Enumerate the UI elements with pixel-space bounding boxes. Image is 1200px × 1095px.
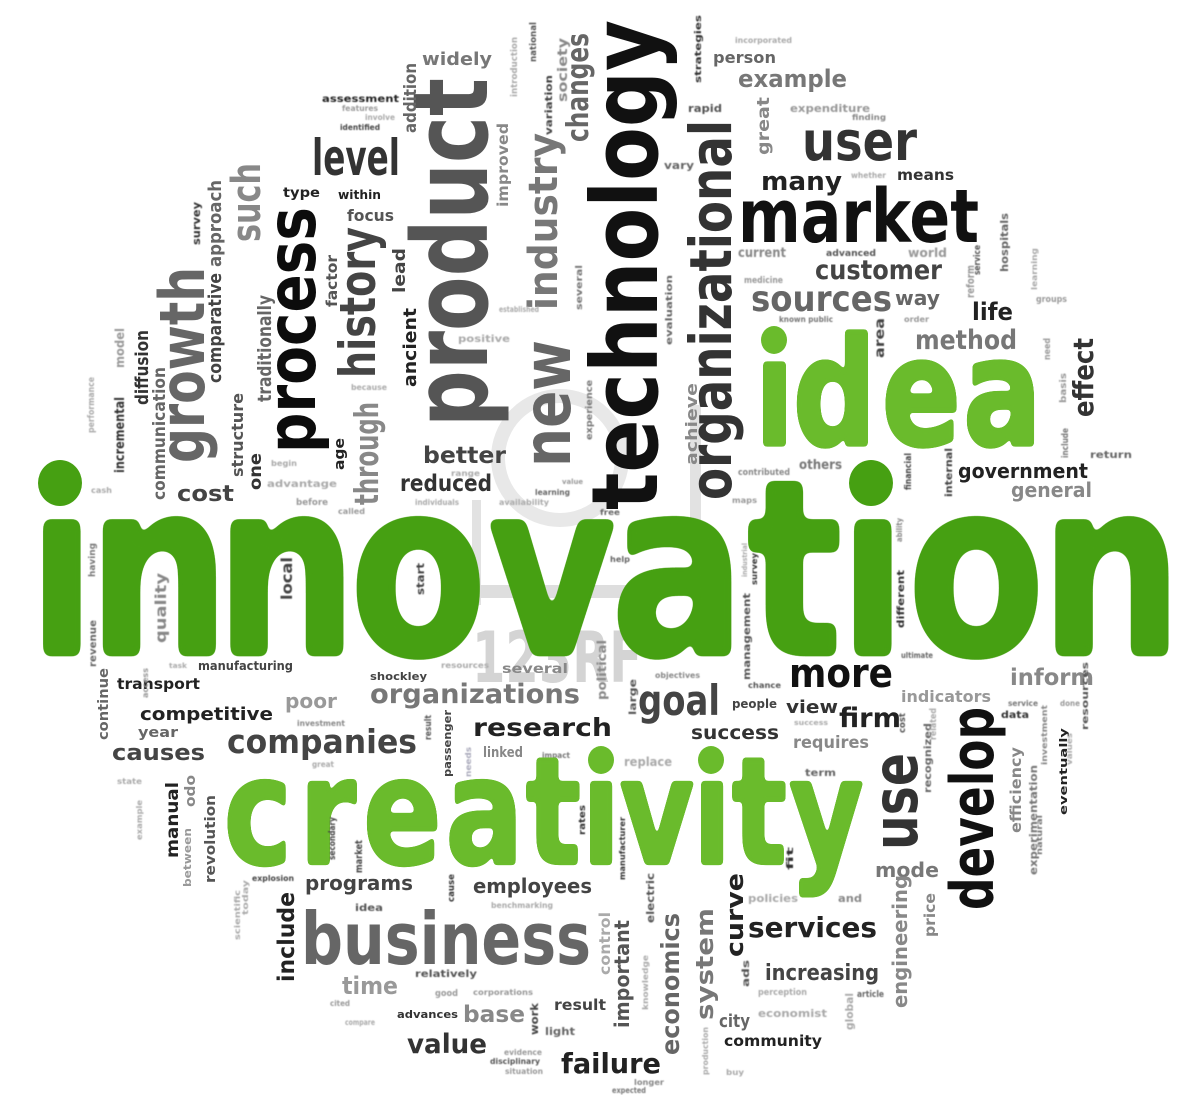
lower-right medium words: economics xyxy=(656,913,685,1055)
lower-left tiny words: corporations xyxy=(473,988,533,997)
top-left tiny words: individuals xyxy=(415,498,459,507)
top-right tiny words: others xyxy=(799,458,842,473)
top-right medium words: great xyxy=(754,97,774,155)
lower-right medium words: view xyxy=(786,697,838,718)
lower-left medium words: linked xyxy=(483,745,523,761)
top-right tiny words: advanced xyxy=(826,249,876,259)
lower-right tiny words: data xyxy=(1001,710,1029,721)
lower-left medium words: between xyxy=(181,828,194,887)
top-left medium words: new xyxy=(509,340,586,467)
top-left tiny words: advantage xyxy=(267,479,337,490)
top-left medium words xyxy=(132,33,596,507)
icon: round dot of idea xyxy=(761,326,787,354)
top-left medium words: structure xyxy=(228,393,247,477)
top-left tiny words: cash xyxy=(91,486,112,495)
central small words: local xyxy=(278,557,296,600)
top-left medium words: industry xyxy=(521,133,567,310)
tiny words over creativity: rates xyxy=(578,805,588,835)
lower-left medium words: revolution xyxy=(203,795,219,883)
top-left medium words: factor xyxy=(323,254,341,307)
lower-right tiny words: objectives xyxy=(655,671,700,680)
lower-right tiny words: perception xyxy=(758,988,807,998)
top-left medium words: better xyxy=(423,443,507,469)
top-right tiny words: maps xyxy=(732,496,757,505)
lower-right tiny words: chance xyxy=(748,681,782,690)
lower-left medium words: several xyxy=(502,662,568,677)
lower-right tiny words: service xyxy=(1008,699,1039,708)
lower-right tiny words: article xyxy=(857,990,884,1000)
word: organizational: organizational xyxy=(677,120,745,500)
lower-left tiny words: light xyxy=(545,1025,575,1038)
lower-left medium words: causes xyxy=(112,741,205,766)
top-right tiny words: order xyxy=(904,315,929,324)
word: business: business xyxy=(301,897,591,981)
top-left tiny words: availability xyxy=(499,498,550,507)
central small words: help xyxy=(610,555,630,564)
lower-right medium words: firm xyxy=(839,703,901,734)
lower-right medium words: services xyxy=(748,911,877,944)
icons: round dots of innovation xyxy=(38,460,893,506)
top-left tiny words: assessment xyxy=(322,94,399,105)
heading word: creativity: creativity xyxy=(223,725,865,900)
watermark xyxy=(472,396,701,699)
top-left tiny words: value xyxy=(562,478,583,486)
top-left medium words: within xyxy=(338,188,381,202)
lower-right medium words: goal xyxy=(638,676,720,725)
lower-right tiny words: longer xyxy=(634,1078,664,1087)
top-right tiny words: several xyxy=(575,265,585,310)
tiny words over creativity xyxy=(328,805,796,880)
lower-left tiny words: work xyxy=(528,1002,541,1035)
top-right medium words: many xyxy=(761,167,842,197)
lower-right tiny words: investment xyxy=(1040,705,1049,765)
lower-right medium words: increasing xyxy=(765,961,879,986)
lower-right medium words: inform xyxy=(1010,665,1094,691)
top-right medium words: user xyxy=(802,110,917,173)
central small words: revenue xyxy=(88,620,99,667)
lower-right tiny words: political xyxy=(595,640,609,700)
lower-right tiny words: and xyxy=(838,892,862,905)
lower-left medium words: research xyxy=(473,713,612,742)
lower-right tiny words: cost xyxy=(898,712,908,733)
top-right tiny words: include xyxy=(1061,428,1071,458)
lower-left tiny words: result xyxy=(424,714,434,740)
top-right medium words: general xyxy=(1011,478,1092,502)
top-right tiny words: vary xyxy=(664,159,694,172)
top-right tiny words: return xyxy=(1090,450,1132,461)
top-right medium words: example xyxy=(738,65,847,93)
lower-right tiny words: expected xyxy=(612,1086,646,1095)
lower-right medium words: failure xyxy=(561,1047,661,1080)
lower-right tiny words: experimentation xyxy=(1027,765,1040,875)
top-left tiny words: features xyxy=(342,104,378,113)
tiny words over creativity: fit xyxy=(786,846,796,870)
top-right tiny words: current xyxy=(738,246,786,261)
lower-right medium words xyxy=(554,651,1094,1080)
lower-left medium words: programs xyxy=(305,871,413,895)
top-left tiny words: strategies xyxy=(694,15,704,83)
lower-left tiny words: explosion xyxy=(252,874,294,883)
central small words: different xyxy=(896,570,907,628)
lower-left tiny words: evidence xyxy=(504,1048,543,1057)
lower-right tiny words: recognized xyxy=(923,723,934,793)
top-left medium words: process xyxy=(253,207,332,453)
lower-left tiny words: state xyxy=(117,777,143,786)
top-right tiny words: whether xyxy=(851,171,886,180)
top-left medium words: age xyxy=(332,438,348,470)
lower-left medium words: employees xyxy=(473,874,592,898)
lower-right tiny words: values xyxy=(1065,733,1074,765)
tiny words over creativity: market xyxy=(354,840,365,873)
top-right medium words xyxy=(682,48,1100,502)
top-left tiny words: involve xyxy=(365,113,396,122)
top-right medium words: customer xyxy=(815,255,943,286)
lower-right medium words: mode xyxy=(875,858,939,882)
top-right tiny words: hospitals xyxy=(998,213,1011,272)
top-left tiny words xyxy=(87,15,704,517)
lower-right medium words: use xyxy=(859,753,932,850)
top-left medium words: such xyxy=(224,163,270,242)
lower-left tiny words: impact xyxy=(542,751,570,760)
top-right tiny words: known public xyxy=(779,315,833,324)
top-left tiny words: called xyxy=(338,507,365,516)
central small words: management xyxy=(742,593,753,680)
top-left medium words: approach xyxy=(205,180,226,267)
top-right medium words: method xyxy=(915,325,1017,356)
top-right medium words: means xyxy=(897,166,954,184)
lower-left tiny words: cause xyxy=(447,874,457,902)
top-right tiny words: basis xyxy=(1059,373,1069,403)
top-left tiny words: performance xyxy=(87,377,97,433)
central small words: start xyxy=(414,563,427,595)
top-right tiny words: world xyxy=(908,246,947,260)
lower-left medium words: base xyxy=(463,1002,525,1028)
top-left medium words: traditionally xyxy=(254,295,276,402)
top-left medium words: changes xyxy=(561,33,596,142)
lower-right medium words: result xyxy=(554,996,606,1014)
top-left tiny words: model xyxy=(113,328,127,368)
lower-left medium words: advances xyxy=(397,1008,458,1021)
lower-right tiny words: success xyxy=(794,719,828,727)
lower-right medium words: success xyxy=(691,722,779,744)
lower-left tiny words: idea xyxy=(355,903,383,914)
lower-left tiny words: investment xyxy=(297,719,345,728)
top-left tiny words: range xyxy=(451,469,481,478)
lower-left medium words: competitive xyxy=(140,704,273,725)
top-left medium words: communication xyxy=(150,367,170,500)
lower-right tiny words: related xyxy=(929,708,939,740)
top-left medium words: level xyxy=(312,129,400,187)
lower-right tiny words: ads xyxy=(741,960,752,987)
top-left medium words: focus xyxy=(347,206,394,225)
top-right tiny words: financial xyxy=(904,453,914,490)
lower-left tiny words: situation xyxy=(505,1067,543,1076)
lower-right medium words: eventually xyxy=(1057,728,1070,815)
top-right medium words: achieve xyxy=(682,383,701,465)
lower-right tiny words: natural xyxy=(1035,815,1044,855)
top-left tiny words: society xyxy=(556,37,571,102)
watermark: 123RF xyxy=(472,617,642,699)
top-left medium words: ancient xyxy=(400,308,421,387)
top-left medium words: reduced xyxy=(400,471,492,497)
lower-left medium words: year xyxy=(138,725,178,741)
heading word: innovation: innovation xyxy=(27,428,1183,714)
top-left medium words: type xyxy=(283,186,320,201)
lower-right medium words: more xyxy=(789,651,893,697)
central small words xyxy=(88,517,907,680)
top-right tiny words: groups xyxy=(1036,295,1067,305)
top-right medium words: way xyxy=(895,286,940,310)
top-left tiny words: variation xyxy=(544,75,555,135)
top-left tiny words: because xyxy=(351,383,388,392)
lower-right tiny words: large xyxy=(628,679,639,715)
lower-left tiny words: example xyxy=(135,799,144,840)
lower-right medium words: engineering xyxy=(888,875,912,1008)
central small words: survey xyxy=(750,552,759,585)
lower-left medium words xyxy=(96,659,612,1060)
lower-right medium words: city xyxy=(719,1011,750,1032)
top-right tiny words: experience xyxy=(585,380,595,440)
top-right medium words: life xyxy=(972,298,1013,326)
lower-right tiny words: knowledge xyxy=(641,954,650,1010)
lower-left tiny words: task xyxy=(169,662,187,670)
lower-right tiny words: global xyxy=(843,993,856,1030)
top-right tiny words: rapid xyxy=(688,102,722,115)
lower-right medium words: people xyxy=(732,697,777,711)
top-right tiny words: need xyxy=(1043,338,1053,360)
top-left medium words: lead xyxy=(390,248,410,293)
top-right tiny words: expenditure xyxy=(790,102,870,115)
lower-right medium words: efficiency xyxy=(1007,747,1025,833)
top-left tiny words: incremental xyxy=(113,397,128,473)
lower-left medium words: transport xyxy=(117,675,200,693)
top-right tiny words: incorporated xyxy=(735,36,792,45)
lower-left medium words: passenger xyxy=(441,709,454,777)
top-right medium words: person xyxy=(713,48,776,67)
lower-left medium words: continue xyxy=(96,668,112,740)
lower-left medium words: shockley xyxy=(370,670,427,683)
lower-left tiny words: scientific xyxy=(233,890,242,940)
lower-left tiny words xyxy=(117,662,575,1076)
lower-left tiny words: disciplinary xyxy=(490,1057,541,1066)
top-right medium words: sources xyxy=(751,279,892,320)
top-right tiny words: area xyxy=(873,318,888,358)
lower-left tiny words: benchmarking xyxy=(491,901,553,910)
top-left medium words: through xyxy=(347,402,386,505)
lower-right medium words: price xyxy=(921,893,939,937)
top-left tiny words: free xyxy=(600,508,621,517)
lower-right medium words: control xyxy=(596,912,614,975)
lower-right medium words: important xyxy=(610,920,634,1028)
top-left medium words: growth xyxy=(146,267,219,463)
top-left tiny words: national xyxy=(529,22,539,62)
central small words: ability xyxy=(895,517,904,542)
top-left tiny words: begin xyxy=(271,459,297,468)
top-left medium words: history xyxy=(329,227,387,378)
lower-right tiny words: replace xyxy=(624,755,672,769)
top-left medium words: addition xyxy=(401,63,421,133)
lower-left medium words: companies xyxy=(227,722,417,761)
lower-right tiny words: done xyxy=(1060,699,1081,708)
lower-left tiny words: good xyxy=(435,989,458,999)
top-left medium words: cost xyxy=(177,482,235,507)
top-right tiny words: reform xyxy=(964,265,977,298)
lower-right medium words: requires xyxy=(793,733,869,753)
icons: round dots of creativity xyxy=(588,746,724,774)
top-right tiny words: evaluation xyxy=(665,275,675,345)
lower-left medium words: manual xyxy=(163,782,183,858)
top-right tiny words: finding xyxy=(852,113,886,122)
top-right medium words: market xyxy=(738,174,979,260)
lower-left tiny words: relatively xyxy=(415,969,478,980)
central small words: resources xyxy=(441,661,489,670)
top-right medium words: effect xyxy=(1067,338,1100,417)
top-left tiny words: before xyxy=(296,498,328,508)
lower-left medium words: include xyxy=(274,892,300,982)
lower-left medium words: manufacturing xyxy=(198,659,293,673)
lower-left tiny words: today xyxy=(241,879,250,915)
top-right tiny words: contributed xyxy=(738,468,790,478)
top-right tiny words: service xyxy=(973,245,983,275)
top-right medium words: government xyxy=(958,459,1088,483)
top-left medium words: one xyxy=(246,453,266,490)
top-left tiny words: established xyxy=(499,305,539,314)
lower-right tiny words: resources xyxy=(1081,662,1091,730)
lower-right tiny words: economist xyxy=(758,1007,827,1020)
lower-right tiny words: buy xyxy=(726,1068,745,1077)
top-left tiny words: introduction xyxy=(510,37,520,97)
lower-left tiny words: compare xyxy=(345,1018,375,1027)
lower-left medium words: poor xyxy=(285,689,337,713)
top-left medium words: diffusion xyxy=(132,330,153,405)
top-left tiny words: survey xyxy=(190,202,203,245)
lower-left medium words: time xyxy=(342,972,398,1000)
heading word: idea: idea xyxy=(754,306,1042,481)
lower-right medium words: indicators xyxy=(901,687,991,706)
central small words: quality xyxy=(152,573,170,643)
lower-right tiny words: ultimate xyxy=(901,651,933,660)
lower-right tiny words: electric xyxy=(644,873,657,923)
central small words: having xyxy=(88,543,98,577)
top-left tiny words: learning xyxy=(535,488,570,497)
top-right tiny words: learning xyxy=(1030,248,1039,290)
lower-left tiny words: cited xyxy=(330,999,350,1008)
lower-left medium words: organizations xyxy=(370,679,580,710)
lower-right tiny words: production xyxy=(701,1027,710,1075)
lower-left medium words: value xyxy=(407,1029,487,1060)
top-left tiny words: positive xyxy=(458,334,510,345)
lower-left tiny words: access xyxy=(141,668,150,698)
top-left medium words: widely xyxy=(422,49,492,70)
lower-right medium words: system xyxy=(691,908,719,1020)
lower-right tiny words: term xyxy=(805,768,836,779)
top-right tiny words: medicine xyxy=(744,276,783,286)
top-right tiny words: internal xyxy=(944,448,955,497)
lower-left tiny words: great xyxy=(312,760,334,769)
lower-right medium words: develop xyxy=(938,707,1008,910)
top-right tiny words xyxy=(575,36,1132,505)
lower-left medium words: odo xyxy=(183,775,199,807)
top-left medium words: improved xyxy=(494,123,512,207)
top-left medium words: comparative xyxy=(205,273,226,383)
lower-right medium words: community xyxy=(724,1032,822,1050)
tiny words over creativity: manufacturer xyxy=(618,817,627,880)
lower-right tiny words: policies xyxy=(748,892,798,905)
lower-left tiny words: needs xyxy=(464,747,473,777)
tiny words over creativity: secondary xyxy=(328,817,338,860)
lower-right tiny words xyxy=(595,640,1091,1095)
top-left tiny words: identified xyxy=(340,123,380,132)
central small words: industrial xyxy=(741,543,749,577)
lower-right medium words: curve xyxy=(721,873,749,957)
